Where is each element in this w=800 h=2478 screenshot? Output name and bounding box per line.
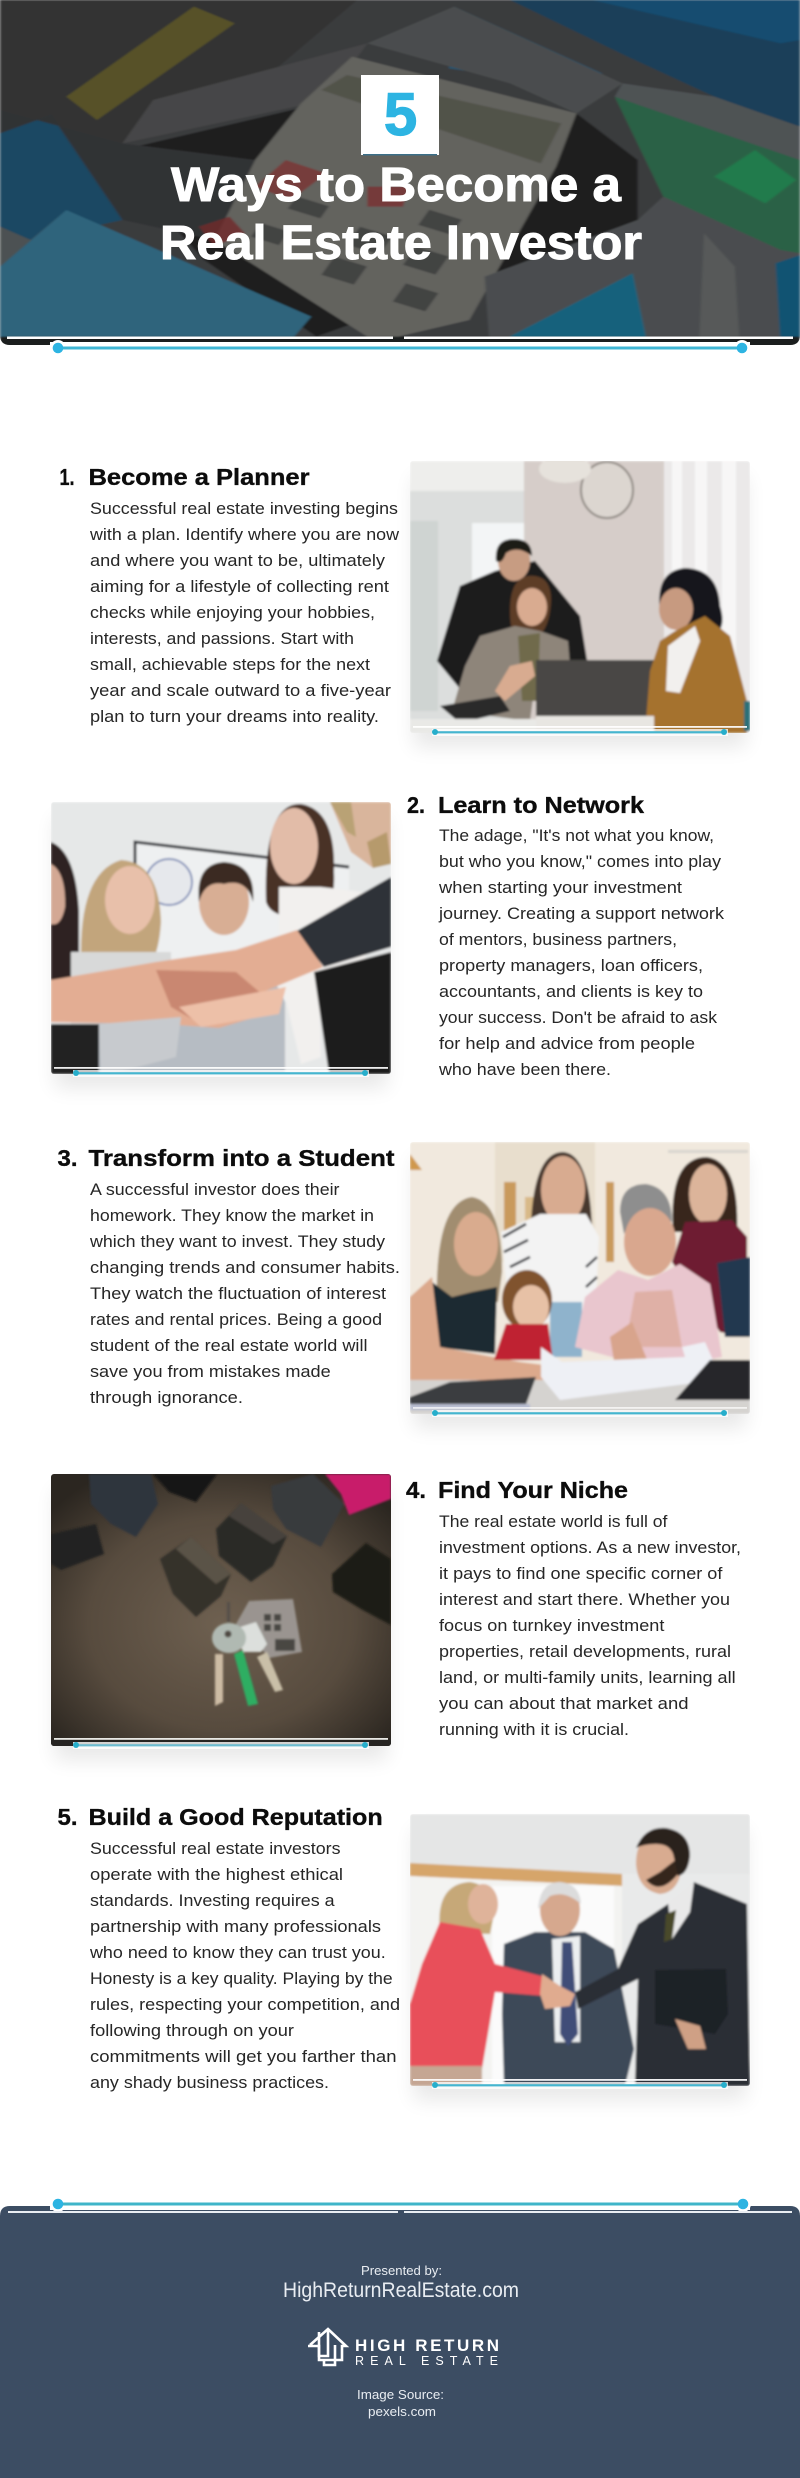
text block: step 2: accountants, and clients is key to (439, 982, 703, 1001)
footer panel (0, 2196, 800, 2478)
text block: step 5: standards. Investing requires a (90, 1891, 335, 1910)
text block: step 5: who need to know they can trust you. (89, 1943, 386, 1962)
text block: step 4: interest and start there. Whether you (439, 1590, 730, 1609)
logo: High Return Real Estate: REAL ESTATE (355, 2354, 498, 2368)
icon: house arrow (308, 2329, 346, 2365)
photo frame line (413, 2079, 747, 2089)
panel: step 3 transform into a student (58, 1142, 750, 1428)
text block: step 5: rules, respecting your competition, and (90, 1995, 400, 2014)
heading: step 4: Find Your Niche (438, 1477, 628, 1503)
text block: step 1: small, achievable steps for the next (90, 655, 370, 674)
heading: step 3: Transform into a Student (88, 1145, 395, 1171)
text block: step 2: journey. Creating a support network (438, 904, 725, 923)
panel: step 2 learn to network (51, 792, 725, 1088)
number badge (361, 75, 439, 156)
heading: step 2: 2. (407, 792, 425, 818)
header decorative frame line (7, 336, 793, 356)
text block: step 5: Successful real estate investors (90, 1839, 340, 1858)
photo: business handshake (410, 1814, 750, 2100)
text block: step 4: properties, retail developments, rural (439, 1642, 731, 1661)
panel: step 4 find your niche (51, 1474, 741, 1760)
photo frame line (54, 1067, 388, 1077)
presented by credit (283, 2263, 519, 2302)
text block: step 3 (89, 1180, 400, 1407)
photo: couple meeting an agent at a laptop (410, 455, 750, 747)
text block: step 4: running with it is crucial. (439, 1720, 629, 1739)
text block: step 3: homework. They know the market in (90, 1206, 374, 1225)
text block: step 4: investment options. As a new investor, (439, 1538, 741, 1557)
photo: model houses and keys (51, 1474, 391, 1760)
heading: step 2: Learn to Network (438, 792, 644, 818)
text block: step 4 (439, 1512, 741, 1739)
text block: step 5: partnership with many professionals (90, 1917, 381, 1936)
text block: step 2: but who you know," comes into play (439, 852, 722, 871)
presented by credit: Presented by: (361, 2263, 442, 2278)
text block: step 4: you can about that market and (439, 1694, 688, 1713)
title (160, 159, 642, 270)
photo: family reviewing documents (410, 1142, 750, 1428)
number badge: 5 (384, 81, 417, 148)
title: Real Estate Investor (160, 217, 642, 270)
text block: step 1: plan to turn your dreams into reality. (90, 707, 379, 726)
text block: step 5: operate with the highest ethical (90, 1865, 343, 1884)
image source credit (357, 2387, 444, 2419)
text block: step 2: when starting your investment (438, 878, 682, 897)
text block: step 3: rates and rental prices. Being a good (90, 1310, 382, 1329)
text block: step 3: student of the real estate world will (90, 1336, 368, 1355)
text block: step 4: land, or multi-family units, learning all (439, 1668, 736, 1687)
text block: step 5: following through on your (90, 2021, 294, 2040)
heading: step 3: 3. (58, 1145, 78, 1171)
text block: step 2: of mentors, business partners, (439, 930, 677, 949)
text block: step 1: with a plan. Identify where you are now (89, 525, 400, 544)
footer decorative frame line (8, 2196, 792, 2213)
heading: step 1: 1. (60, 464, 74, 490)
text block: step 3: save you from mistakes made (90, 1362, 331, 1381)
image source credit: pexels.com (368, 2404, 436, 2419)
text block: step 5: any shady business practices. (90, 2073, 329, 2092)
title: Ways to Become a (171, 159, 621, 212)
text block: step 1: interests, and passions. Start with (90, 629, 354, 648)
panel: step 1 become a planner (60, 455, 750, 747)
text block: step 5: Honesty is a key quality. Playing by the (90, 1969, 393, 1988)
photo frame line (413, 1407, 747, 1417)
text block: step 3: changing trends and consumer habits. (90, 1258, 400, 1277)
text block: step 1: aiming for a lifestyle of collecting rent (90, 577, 389, 596)
text block: step 2: for help and advice from people (439, 1034, 695, 1053)
logo: High Return Real Estate (308, 2329, 499, 2368)
photo frame line (51, 1738, 391, 1749)
text block: step 1: Successful real estate investing begins (90, 499, 398, 518)
text block: step 5 (89, 1839, 400, 2092)
text block: step 4: it pays to find one specific corner of (439, 1564, 723, 1583)
photo: team stacking hands (51, 802, 391, 1088)
text block: step 5: commitments will get you farther than (90, 2047, 396, 2066)
text block: step 4: focus on turnkey investment (439, 1616, 665, 1635)
text block: step 1 (89, 499, 400, 726)
text block: step 2: who have been there. (438, 1060, 611, 1079)
text block: step 2: your success. Don't be afraid to ask (439, 1008, 718, 1027)
text block: step 3: which they want to invest. They study (89, 1232, 386, 1251)
text block: step 3: A successful investor does their (90, 1180, 340, 1199)
heading: step 5: 5. (58, 1804, 78, 1830)
photo frame line (413, 726, 747, 736)
text block: step 3: They watch the fluctuation of interest (90, 1284, 386, 1303)
panel: step 5 build a good reputation (58, 1804, 750, 2100)
text block: step 2: The adage, "It's not what you know, (439, 826, 714, 845)
heading: step 4: 4. (406, 1477, 426, 1503)
header banner (0, 0, 800, 356)
presented by credit: HighReturnRealEstate.com (283, 2279, 519, 2302)
text block: step 3: through ignorance. (90, 1388, 243, 1407)
text block: step 4: The real estate world is full of (439, 1512, 668, 1531)
heading: step 1: Become a Planner (88, 464, 310, 490)
footer background (0, 2206, 800, 2478)
heading: step 5: Build a Good Reputation (88, 1804, 383, 1830)
image source credit: Image Source: (357, 2387, 444, 2402)
text block: step 1: year and scale outward to a five-year (90, 681, 391, 700)
logo: High Return Real Estate: HIGH RETURN (355, 2336, 499, 2355)
text block: step 1: checks while enjoying your hobbies, (90, 603, 375, 622)
text block: step 1: and where you want to be, ultimately (90, 551, 386, 570)
header background photo: calculator and real estate flyers (0, 0, 800, 347)
text block: step 2: property managers, loan officers, (439, 956, 703, 975)
text block: step 2 (438, 826, 725, 1079)
